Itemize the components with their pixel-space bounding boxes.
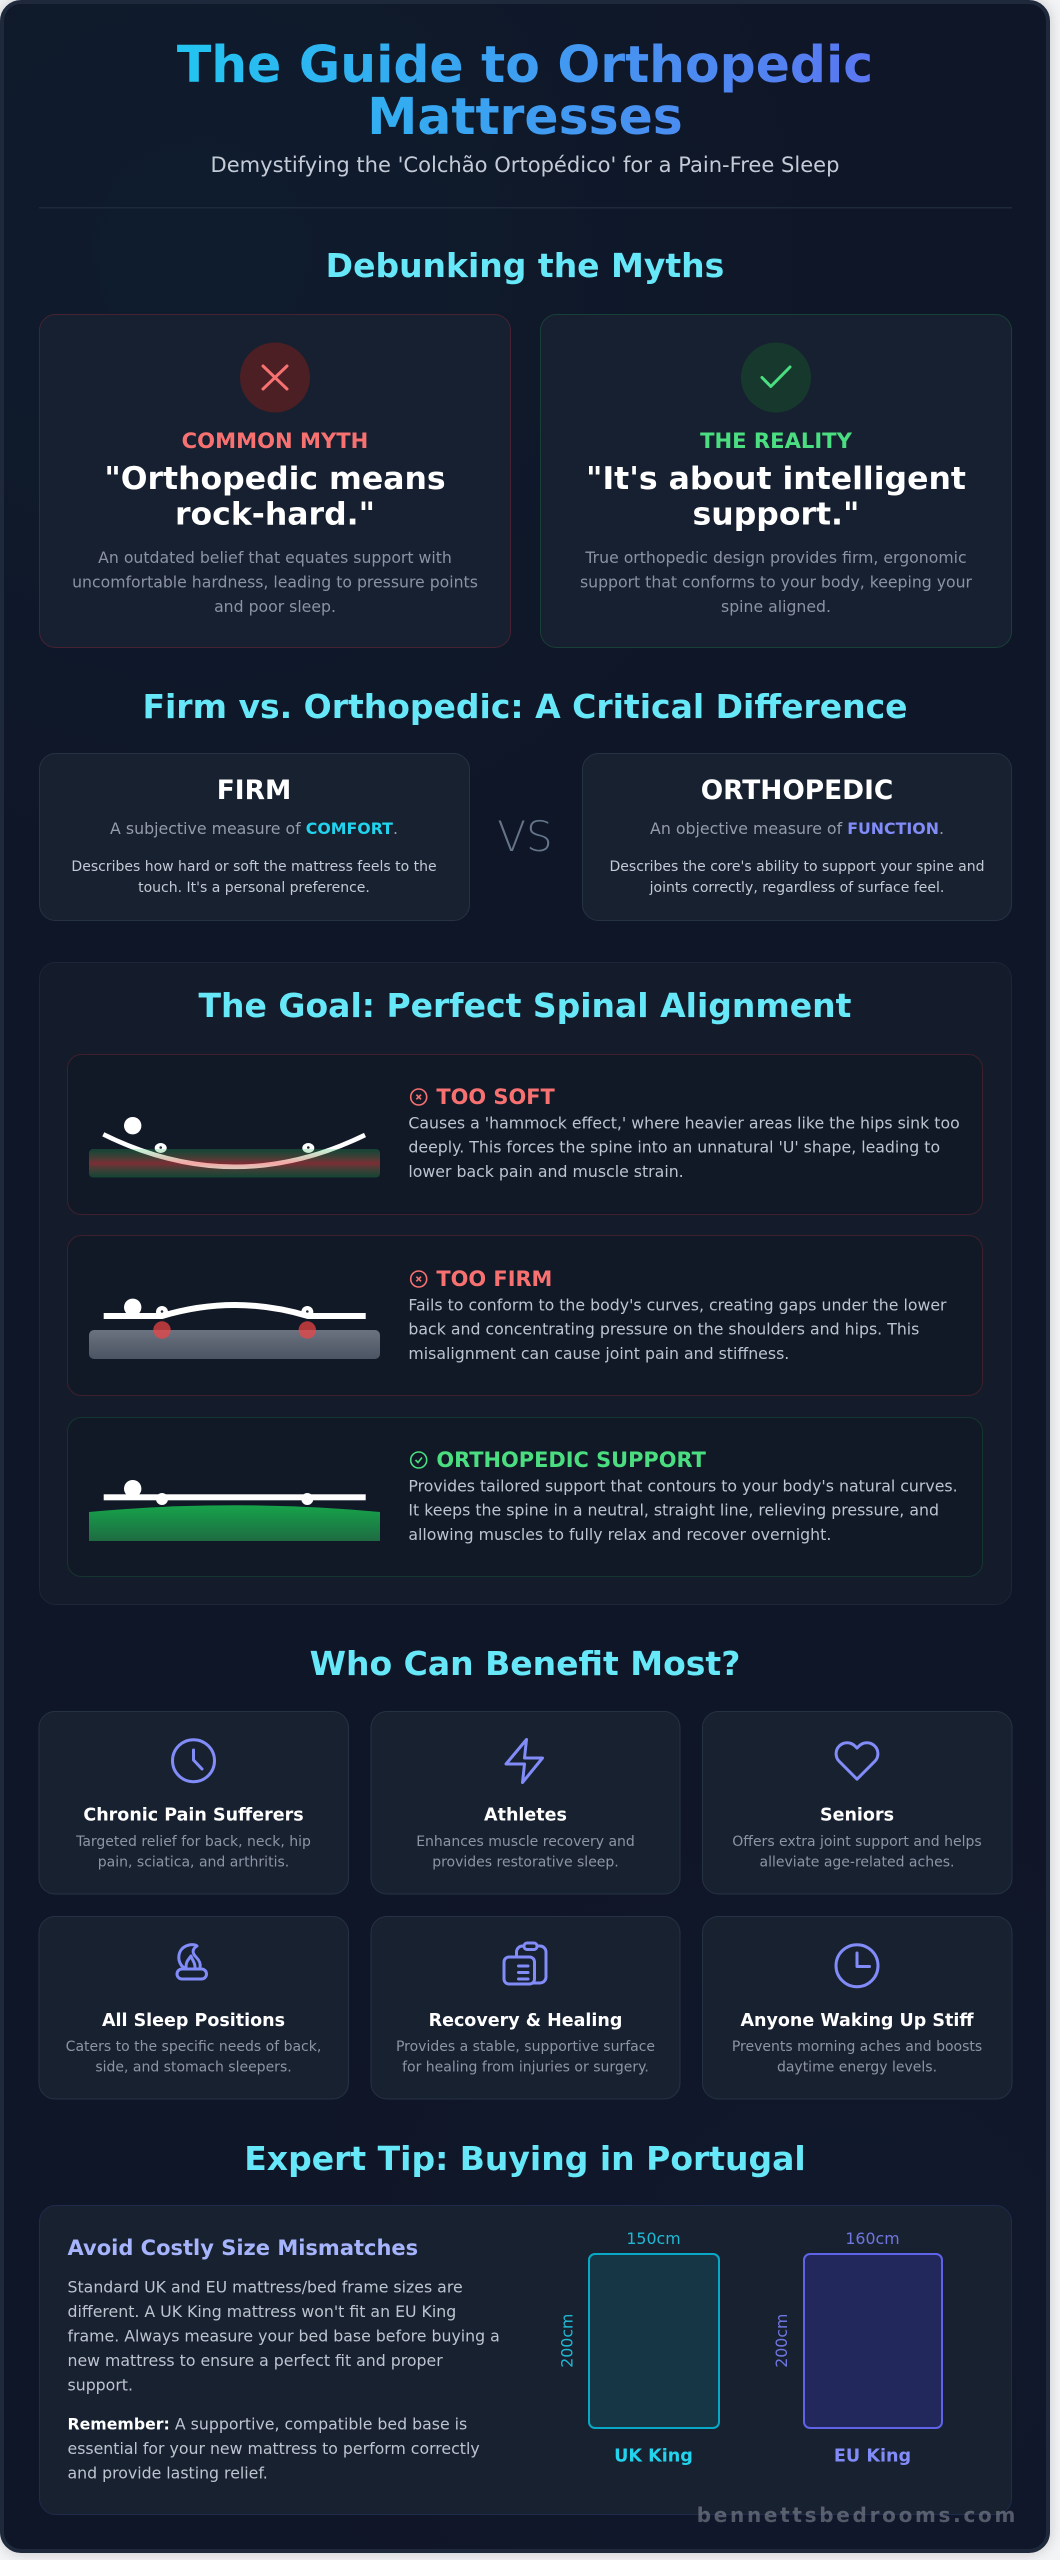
orthopedic support text: It keeps the spine in a neutral, straight line, relieving pressure, and — [408, 1501, 939, 1520]
diagram: too soft — [89, 1117, 380, 1178]
icon: heart — [836, 1743, 878, 1779]
firm measure: A subjective measure of COMFORT. — [110, 819, 398, 838]
reality quote: support." — [693, 496, 859, 532]
heading: expert tip: Expert Tip: Buying in Portugal — [244, 2139, 806, 2178]
too firm text: Fails to conform to the body's curves, creating gaps under the lower — [408, 1295, 947, 1314]
card: orthopedic support — [68, 1418, 982, 1576]
size diagram: uk king: 200cm — [558, 2314, 576, 2368]
tip text: frame. Always measure your bed base before buying a — [68, 2327, 500, 2346]
vs label: VS — [497, 812, 553, 861]
myth quote: "Orthopedic means — [104, 461, 446, 497]
myth quote — [104, 461, 446, 532]
tip text: support. — [68, 2376, 133, 2395]
benefit description: daytime energy levels. — [777, 2060, 937, 2076]
size diagram: eu king: 200cm — [772, 2314, 791, 2368]
tip reminder: Remember: A supportive, compatible bed base is — [68, 2414, 467, 2433]
card: seniors — [702, 1712, 1012, 1894]
heading: debunking the myths: Debunking the Myths — [326, 246, 724, 285]
card: athletes — [371, 1712, 680, 1894]
reality quote — [586, 461, 966, 532]
heading: firm vs orthopedic: Firm vs. Orthopedic: A Critical Difference — [142, 687, 908, 726]
card: anyone waking up stiff — [702, 1916, 1012, 2099]
benefit title: Seniors — [820, 1806, 894, 1826]
too soft text: lower back pain and muscle strain. — [408, 1162, 684, 1181]
reality quote: "It's about intelligent — [586, 461, 966, 497]
orthopedic support heading: ORTHOPEDIC SUPPORT — [436, 1448, 707, 1472]
orthopedic support text: Provides tailored support that contours to your body's natural curves. — [408, 1476, 958, 1495]
reality text: support that conforms to your body, keeping your — [580, 572, 973, 592]
tip text — [68, 2278, 500, 2395]
too firm text: misalignment can cause joint pain and stiffness. — [408, 1344, 789, 1363]
orthopedic description: Describes the core's ability to support your spine and — [610, 859, 984, 875]
benefit description — [732, 2039, 982, 2076]
icon: clock — [836, 1945, 878, 1987]
benefit description: Enhances muscle recovery and — [416, 1834, 635, 1850]
orthopedic description — [610, 859, 984, 896]
orthopedic measure: An objective measure of FUNCTION. — [650, 819, 944, 838]
too soft text: deeply. This forces the spine into an unnatural 'U' shape, leading to — [408, 1138, 940, 1157]
benefit title: Athletes — [484, 1806, 567, 1826]
tip text: different. A UK King mattress won't fit an EU King — [68, 2302, 456, 2321]
myth text: An outdated belief that equates support with — [98, 548, 452, 567]
size diagram: eu king: EU King — [834, 2447, 911, 2467]
orthopedic support text: allowing muscles to fully relax and recover overnight. — [408, 1525, 831, 1544]
reality text: spine aligned. — [721, 597, 831, 616]
panel: expert tip — [40, 2206, 1012, 2514]
firm description: Describes how hard or soft the mattress feels to the — [71, 859, 437, 875]
heading: perfect spinal alignment: The Goal: Perfect Spinal Alignment — [199, 986, 852, 1025]
benefit description: alleviate age-related aches. — [760, 1855, 954, 1871]
benefit description: for healing from injuries or surgery. — [402, 2060, 649, 2076]
size diagram: uk king — [558, 2229, 719, 2467]
title — [177, 35, 873, 146]
icon: flame and pillow — [177, 1945, 206, 1979]
size diagram: uk king: UK King — [614, 2447, 693, 2467]
orthopedic support text — [408, 1476, 958, 1544]
panel: spinal alignment — [40, 962, 1012, 1604]
myth text — [72, 548, 478, 616]
benefit description — [75, 1834, 311, 1871]
tip text: Standard UK and EU mattress/bed frame sizes are — [68, 2278, 463, 2297]
benefit description — [66, 2039, 321, 2076]
too firm text: back and concentrating pressure on the shoulders and hips. This — [408, 1320, 919, 1339]
benefit description: Provides a stable, supportive surface — [396, 2039, 655, 2055]
size diagram: uk king: 150cm — [626, 2229, 681, 2248]
icon: lightning — [506, 1740, 542, 1782]
tip reminder — [68, 2414, 480, 2482]
orthopedic description: joints correctly, regardless of surface feel. — [649, 880, 944, 896]
too firm text — [408, 1295, 947, 1363]
firm description: touch. It's a personal preference. — [138, 880, 370, 896]
benefit description: Prevents morning aches and boosts — [732, 2039, 982, 2055]
reality text — [580, 548, 973, 616]
benefit title: Anyone Waking Up Stiff — [740, 2011, 974, 2031]
myth text: and poor sleep. — [214, 597, 336, 616]
too soft heading: TOO SOFT — [436, 1085, 556, 1109]
size diagram: eu king — [772, 2229, 942, 2467]
benefit title: Recovery & Healing — [429, 2011, 622, 2031]
benefit description — [396, 2039, 655, 2076]
benefit description: provides restorative sleep. — [432, 1855, 619, 1871]
myth label: COMMON MYTH — [182, 428, 368, 453]
subtitle: Demystifying the 'Colchão Ortopédico' for a Pain-Free Sleep — [211, 152, 839, 177]
benefit title: All Sleep Positions — [102, 2011, 285, 2031]
benefit description — [732, 1834, 982, 1871]
size diagram: eu king: 160cm — [845, 2229, 900, 2248]
panel: common myth — [40, 314, 510, 648]
myth quote: rock-hard." — [175, 496, 375, 532]
icon: clipboard — [504, 1943, 546, 1984]
reality text: True orthopedic design provides firm, ergonomic — [584, 548, 967, 567]
diagram: orthopedic support — [89, 1480, 380, 1541]
benefit description: side, and stomach sleepers. — [95, 2060, 292, 2076]
card: recovery and healing — [371, 1916, 680, 2099]
icon: clock — [172, 1740, 214, 1782]
icon: check — [741, 342, 811, 412]
firm description — [71, 859, 437, 896]
card: too firm — [68, 1236, 982, 1396]
benefit description: Caters to the specific needs of back, — [66, 2039, 321, 2055]
benefit description: pain, sciatica, and arthritis. — [98, 1855, 289, 1871]
watermark: bennettsbedrooms.com — [697, 2503, 1018, 2527]
tip reminder: essential for your new mattress to perform correctly — [68, 2439, 480, 2458]
tip heading: Avoid Costly Size Mismatches — [68, 2236, 418, 2260]
card: all sleep positions — [39, 1916, 348, 2099]
firm title: FIRM — [217, 775, 291, 806]
card: too soft — [68, 1054, 982, 1214]
tip reminder: and provide lasting relief. — [68, 2463, 268, 2482]
benefit title: Chronic Pain Sufferers — [83, 1806, 304, 1826]
myth text: uncomfortable hardness, leading to pressure points — [72, 572, 478, 592]
panel: orthopedic — [582, 754, 1012, 920]
panel: the reality — [540, 314, 1012, 648]
too soft text — [408, 1113, 960, 1181]
too soft text: Causes a 'hammock effect,' where heavier areas like the hips sink too — [408, 1113, 960, 1132]
card: chronic pain sufferers — [39, 1712, 348, 1894]
benefit description: Targeted relief for back, neck, hip — [75, 1834, 311, 1850]
benefit description: Offers extra joint support and helps — [732, 1834, 982, 1850]
reality label: THE REALITY — [700, 428, 853, 453]
title: The Guide to Orthopedic — [177, 35, 873, 94]
too firm heading: TOO FIRM — [436, 1267, 552, 1291]
panel: firm — [40, 754, 470, 920]
heading: who can benefit: Who Can Benefit Most? — [310, 1644, 740, 1683]
benefit description — [416, 1834, 635, 1871]
diagram: too firm — [89, 1299, 380, 1359]
icon: cross — [240, 342, 310, 412]
title: Mattresses — [367, 87, 683, 146]
tip text: new mattress to ensure a perfect fit and proper — [68, 2351, 443, 2370]
orthopedic title: ORTHOPEDIC — [701, 775, 893, 806]
